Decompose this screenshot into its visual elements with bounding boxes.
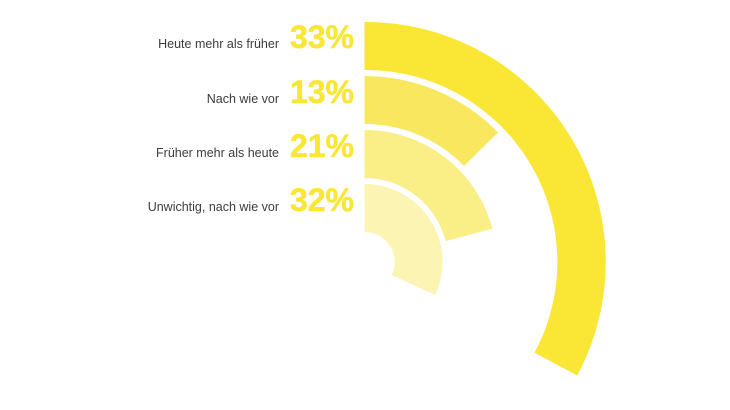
arc: Früher mehr als heute 21%	[364, 130, 492, 241]
value: 21%: 21%	[290, 128, 354, 164]
label: Früher mehr als heute: Früher mehr als heute	[156, 146, 279, 160]
arc: Nach wie vor 13%	[364, 76, 498, 166]
arc: Heute mehr als früher 33%	[364, 22, 606, 375]
label: Nach wie vor: Nach wie vor	[207, 92, 279, 106]
value: 32%: 32%	[290, 182, 354, 218]
label: Unwichtig, nach wie vor: Unwichtig, nach wie vor	[148, 200, 279, 214]
value: 33%: 33%	[290, 19, 354, 55]
value: 13%: 13%	[290, 74, 354, 110]
arc: Unwichtig, nach wie vor 32%	[364, 184, 443, 295]
label: Heute mehr als früher: Heute mehr als früher	[158, 37, 279, 51]
